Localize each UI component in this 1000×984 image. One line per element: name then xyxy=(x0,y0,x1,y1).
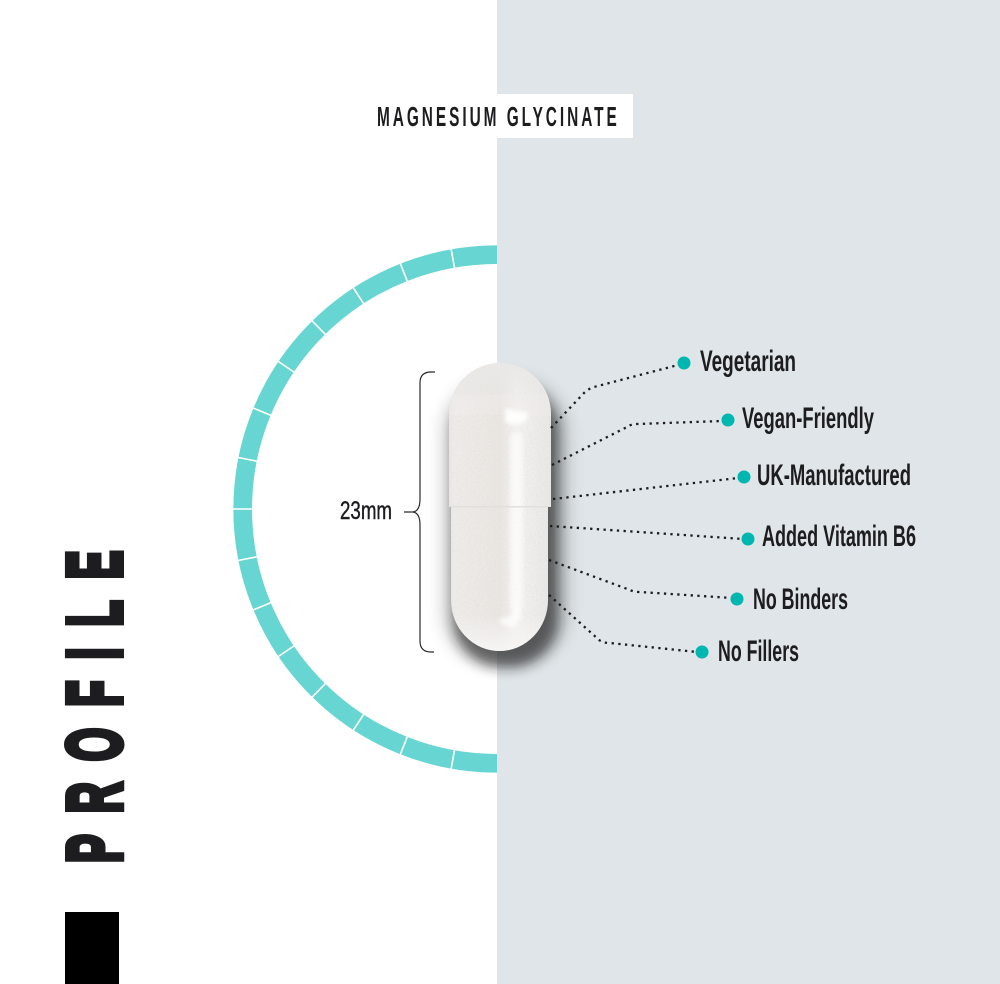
callout: vegetarian xyxy=(551,345,796,428)
background panel xyxy=(497,0,1000,984)
black block xyxy=(65,912,119,984)
title label xyxy=(365,94,633,138)
callout: no binders xyxy=(549,560,848,616)
length label: 23mm xyxy=(340,497,392,525)
callout: vegan-friendly: Vegan-Friendly xyxy=(742,402,874,435)
callout: no fillers: No Fillers xyxy=(718,635,799,668)
callout: vegetarian: Vegetarian xyxy=(700,345,796,378)
capsule xyxy=(449,363,551,652)
capsule shadow xyxy=(444,380,566,667)
callout: uk-manufactured: UK-Manufactured xyxy=(757,459,911,492)
callout: vegan-friendly xyxy=(552,402,874,465)
vertical heading: profile: PROFILE xyxy=(53,551,138,863)
length brace xyxy=(404,372,435,652)
callout: added vitamin b6 xyxy=(550,520,916,553)
callout: uk-manufactured xyxy=(553,459,911,499)
callout: no fillers xyxy=(549,595,799,668)
callout: no binders: No Binders xyxy=(753,583,848,616)
title label: MAGNESIUM GLYCINATE xyxy=(377,101,617,132)
teal segmented ring xyxy=(233,245,497,773)
